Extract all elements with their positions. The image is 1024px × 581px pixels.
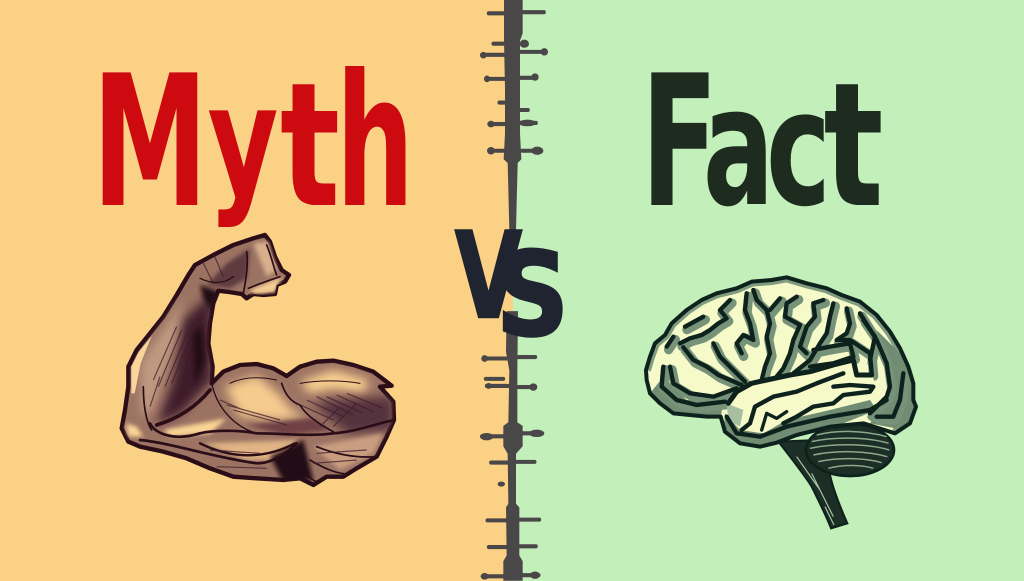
heading: Myth: t xyxy=(280,45,340,246)
sulci dark lines xyxy=(662,290,903,437)
divider: thorned central spine xyxy=(480,0,548,581)
heading: Myth: y xyxy=(208,53,278,231)
cerebrum xyxy=(646,277,916,447)
arm hatching xyxy=(150,253,383,468)
gyri shadow xyxy=(664,293,905,420)
brain stem xyxy=(778,440,847,528)
heading: Fact: a xyxy=(703,51,774,243)
heading: Fact: c xyxy=(766,55,831,242)
arm shading xyxy=(126,242,393,482)
heading: Fact: t xyxy=(824,45,884,246)
heading: Fact: F xyxy=(641,36,718,248)
brain rim shading xyxy=(646,277,920,433)
heading: Myth: M xyxy=(92,36,208,248)
cerebrum outline xyxy=(646,277,916,447)
temporal lobe fill xyxy=(730,363,874,406)
heading: Myth: h xyxy=(336,36,414,249)
panel: myth background xyxy=(0,0,513,581)
icon: flexed muscular arm xyxy=(122,235,394,485)
icon: brain xyxy=(646,277,920,528)
cerebellum xyxy=(806,424,894,476)
heading: VS: S xyxy=(496,228,569,363)
arm contour lines xyxy=(140,245,394,483)
cerebellum ridges xyxy=(810,431,889,468)
panel: fact background xyxy=(513,0,1024,581)
temporal lobe lower shade xyxy=(723,400,877,448)
heading: VS: V xyxy=(455,208,522,346)
stem highlights xyxy=(797,457,834,525)
